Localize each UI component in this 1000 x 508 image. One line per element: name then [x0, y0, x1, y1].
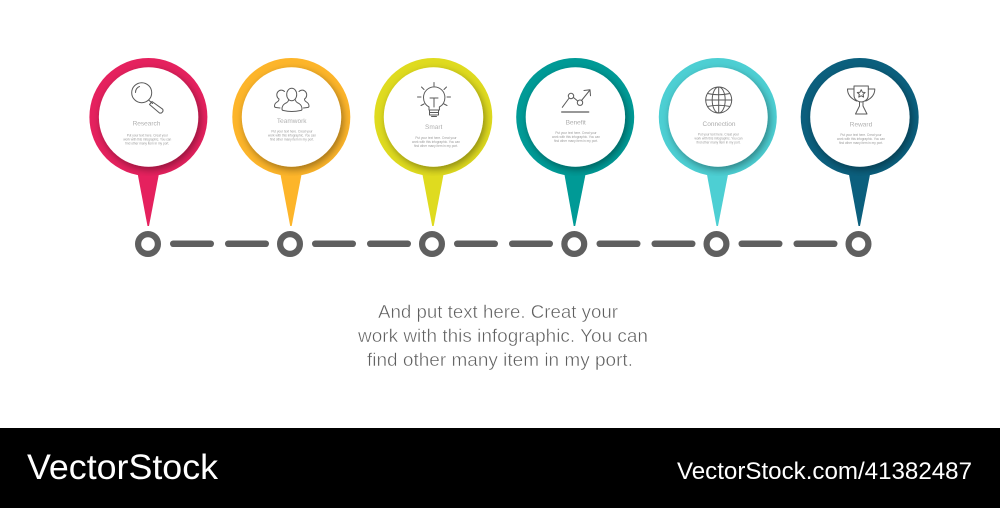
text: connection description [694, 132, 743, 144]
footer logo text: VectorStock [27, 448, 219, 487]
panel: smart pin [374, 58, 492, 226]
label: smart: Smart [425, 124, 443, 131]
icon: magnifier [132, 83, 163, 113]
text: research description: find other many item in my port. [125, 141, 169, 145]
footer bar [0, 428, 1000, 508]
text: benefit description: find other many item in my port. [554, 139, 598, 143]
text block: main description: And put text here. Creat your [378, 302, 618, 322]
text: teamwork description [268, 130, 316, 142]
text: smart description: work with this infographic. You can [412, 140, 460, 144]
text: smart description: find other many item in my port. [414, 144, 458, 148]
label: teamwork: Teamwork [277, 118, 307, 125]
text: connection description: Put your text here. Creat your [698, 132, 739, 136]
text: benefit description: work with this infographic. You can [552, 135, 600, 139]
icon: globe [706, 87, 732, 113]
timeline [138, 234, 868, 254]
text: smart description: Put your text here. Creat your [415, 136, 457, 140]
text: reward description [837, 133, 885, 145]
panel: teamwork pin [232, 58, 350, 226]
panel: research pin [89, 58, 207, 226]
text: benefit description [552, 131, 600, 143]
label: connection: Connection [703, 121, 736, 128]
label: reward: Reward [850, 121, 873, 128]
text: reward description: work with this infographic. You can [837, 137, 885, 141]
icon: growth chart [562, 90, 590, 112]
text: connection description: find other many item in my port. [696, 140, 741, 144]
text: connection description: work with this infographic. You can [694, 136, 743, 140]
icon: trophy [848, 86, 875, 114]
text: research description [123, 133, 172, 145]
text: research description: work with this infographic. You can [123, 137, 172, 141]
text: reward description: find other many item in my port. [839, 141, 883, 145]
panel: benefit pin [516, 58, 634, 226]
icon: light bulb [418, 82, 450, 116]
text block: main description [357, 302, 648, 370]
icon: team [274, 88, 309, 112]
text: teamwork description: Put your text here. Creat your [271, 130, 313, 134]
text: reward description: Put your text here. Creat your [840, 133, 882, 137]
text block: main description: work with this infographic. You can [357, 326, 648, 346]
panel: reward pin [801, 58, 919, 226]
panel: connection pin [659, 58, 777, 226]
label: research: Research [133, 121, 161, 128]
text: smart description [412, 136, 460, 148]
text: teamwork description: find other many item in my port. [270, 138, 314, 142]
text: research description: Put your text here. Creat your [127, 133, 168, 137]
footer url text: VectorStock.com/41382487 [677, 458, 972, 485]
text: teamwork description: work with this infographic. You can [268, 134, 316, 138]
text block: main description: find other many item in my port. [367, 350, 633, 370]
text: benefit description: Put your text here. Creat your [555, 131, 597, 135]
label: benefit: Benefit [566, 119, 586, 126]
